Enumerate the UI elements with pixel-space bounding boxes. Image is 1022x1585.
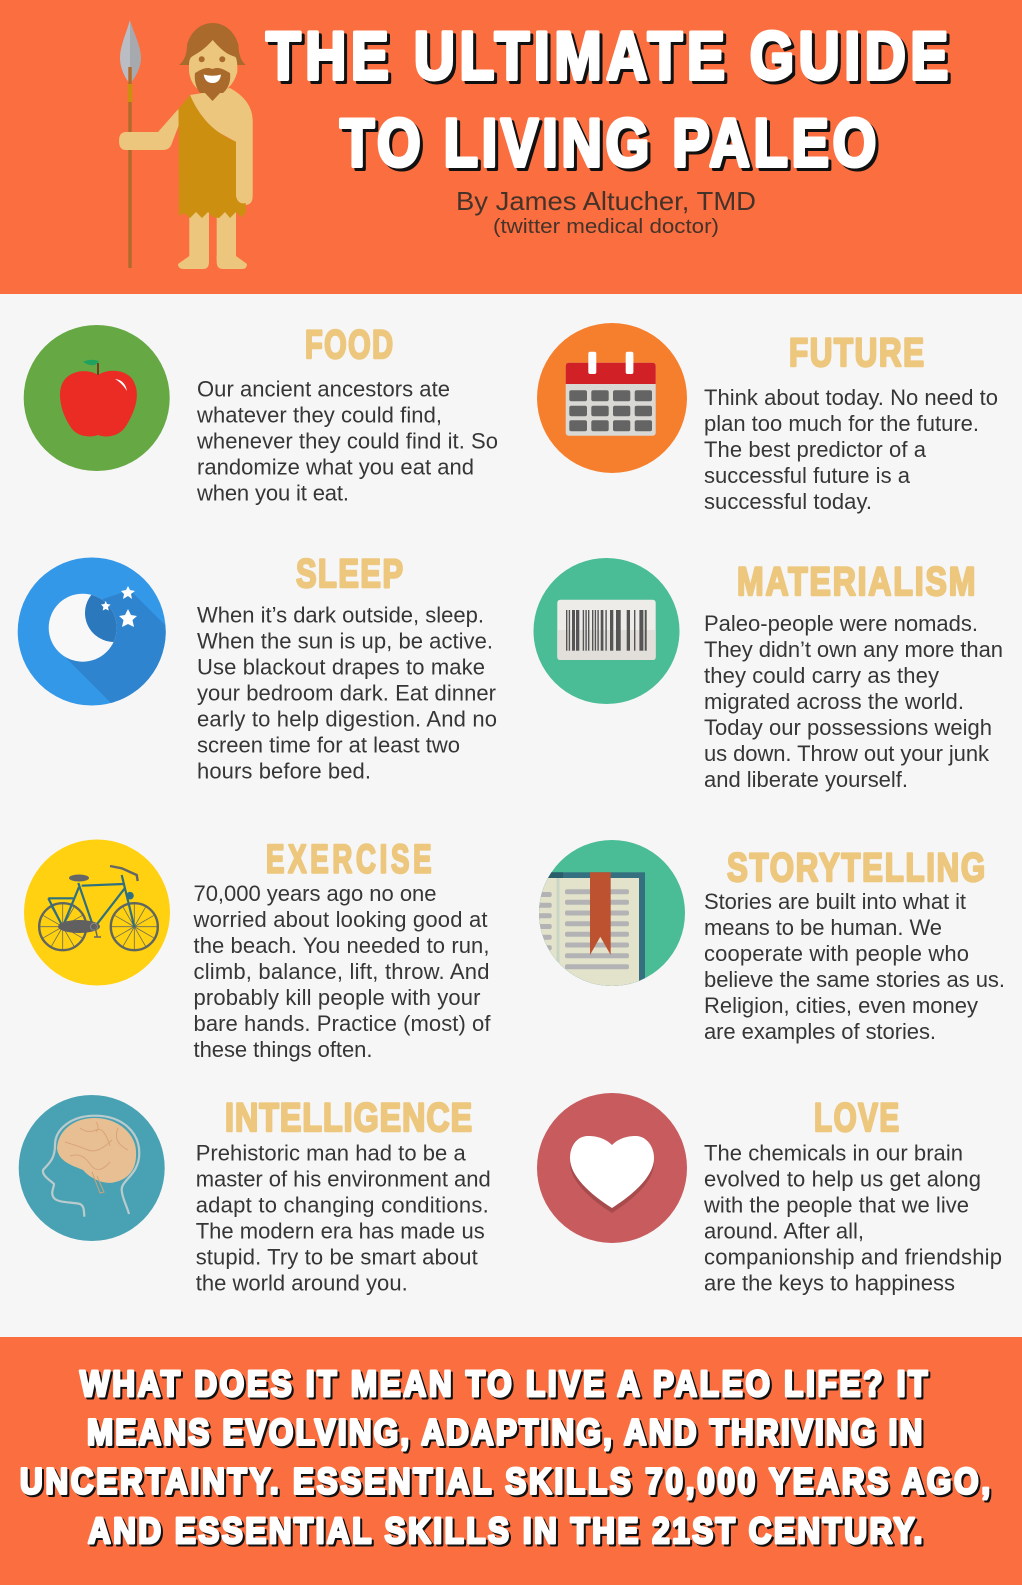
text: exercise: 70,000 years ago no one <box>194 881 436 906</box>
heading: intelligence: INTELLIGENCE <box>225 1095 472 1140</box>
text: food: whenever they could find it. So <box>196 429 498 454</box>
heading: materialism: MATERIALISM <box>737 559 975 604</box>
text: storytelling: Stories are built into what it <box>704 889 966 914</box>
text: intelligence: Prehistoric man had to be a <box>196 1141 466 1166</box>
text: love: evolved to help us get along <box>704 1167 981 1192</box>
text: future <box>704 385 998 514</box>
title: THE ULTIMATE GUIDE <box>266 18 948 94</box>
panel: storytelling <box>530 840 1005 1044</box>
text: love: companionship and friendship <box>704 1245 1002 1270</box>
text: storytelling: cooperate with people who <box>704 941 969 966</box>
title <box>266 18 948 181</box>
text: exercise: climb, balance, lift, throw. And <box>194 959 490 984</box>
icon: brain in head <box>19 1095 165 1241</box>
text: materialism: us down. Throw out your junk <box>704 741 990 766</box>
text: food: whatever they could find, <box>196 403 442 428</box>
text: love: are the keys to happiness <box>704 1271 955 1296</box>
text: future: Think about today. No need to <box>704 385 998 410</box>
heading: future: FUTURE <box>789 329 924 375</box>
text: future: The best predictor of a <box>704 437 927 462</box>
heading: storytelling: STORYTELLING <box>727 845 985 890</box>
text: materialism: Paleo-people were nomads. <box>704 611 978 636</box>
icon: bicycle <box>24 840 170 986</box>
text: food: randomize what you eat and <box>197 455 474 480</box>
text: sleep: When the sun is up, be active. <box>197 629 493 654</box>
icon: barcode <box>534 558 680 704</box>
text: future: plan too much for the future. <box>704 411 979 436</box>
text: storytelling <box>704 889 1005 1044</box>
text: storytelling: means to be human. We <box>704 915 942 940</box>
footer statement <box>20 1364 990 1552</box>
panel: materialism <box>534 558 1003 792</box>
panel: intelligence <box>19 1095 491 1296</box>
text: food <box>196 377 498 506</box>
text: sleep: When it’s dark outside, sleep. <box>197 603 484 628</box>
text: materialism: Today our possessions weigh <box>704 715 992 740</box>
text: intelligence: The modern era has made us <box>196 1219 485 1244</box>
heading: sleep: SLEEP <box>296 551 403 596</box>
panel: food <box>24 322 498 506</box>
title: TO LIVING PALEO <box>340 106 876 181</box>
text: exercise <box>192 881 491 1062</box>
icon: calendar <box>537 323 687 473</box>
text: food: Our ancient ancestors ate <box>197 377 450 402</box>
text: intelligence: the world around you. <box>196 1271 408 1296</box>
footer statement: MEANS EVOLVING, ADAPTING, AND THRIVING IN <box>87 1412 922 1453</box>
icon: spear <box>120 20 141 268</box>
panel: sleep <box>18 551 497 784</box>
text: storytelling: believe the same stories as us. <box>704 967 1005 992</box>
text: future: successful future is a <box>704 463 911 488</box>
text: sleep: your bedroom dark. Eat dinner <box>197 681 496 706</box>
text: food: when you it eat. <box>196 481 349 506</box>
text: love: with the people that we live <box>703 1193 969 1218</box>
text: love: around. After all, <box>704 1219 864 1244</box>
text: love: The chemicals in our brain <box>704 1141 963 1166</box>
panel: exercise <box>24 838 491 1062</box>
heading: food: FOOD <box>305 322 393 367</box>
text: exercise: worried about looking good at <box>192 907 488 932</box>
text: storytelling: Religion, cities, even money <box>704 993 978 1018</box>
text: intelligence: master of his environment and <box>196 1167 491 1192</box>
text: materialism: migrated across the world. <box>704 689 964 714</box>
text: sleep: Use blackout drapes to make <box>197 655 485 680</box>
footer statement: UNCERTAINTY. ESSENTIAL SKILLS 70,000 YEARS AGO, <box>20 1461 990 1502</box>
text: materialism: They didn’t own any more than <box>704 637 1003 662</box>
text: materialism: they could carry as they <box>704 663 939 688</box>
text: exercise: probably kill people with your <box>194 985 480 1010</box>
panel: love <box>537 1093 1002 1296</box>
text: sleep: hours before bed. <box>197 759 371 784</box>
text: exercise: these things often. <box>194 1037 372 1062</box>
icon: book <box>539 840 685 986</box>
text: future: successful today. <box>704 489 872 514</box>
icon: caveman <box>119 23 253 269</box>
icon: apple <box>24 325 170 471</box>
panel: footer <box>0 1337 1022 1585</box>
text: intelligence: adapt to changing conditions. <box>196 1193 489 1218</box>
text: sleep <box>197 603 497 784</box>
text: love <box>703 1141 1002 1296</box>
icon: moon and stars <box>18 558 166 706</box>
panel: future <box>537 323 998 514</box>
panel: header <box>0 0 1022 294</box>
text: intelligence <box>196 1141 491 1296</box>
heading: exercise: EXERCISE <box>266 838 432 882</box>
text: exercise: the beach. You needed to run, <box>194 933 490 958</box>
text: exercise: bare hands. Practice (most) of <box>194 1011 491 1036</box>
heading: love: LOVE <box>814 1096 899 1140</box>
text: intelligence: stupid. Try to be smart about <box>196 1245 478 1270</box>
byline: By James Altucher, TMD <box>456 186 756 216</box>
text: materialism <box>704 611 1003 792</box>
footer statement: WHAT DOES IT MEAN TO LIVE A PALEO LIFE? IT <box>80 1364 928 1405</box>
footer statement: AND ESSENTIAL SKILLS IN THE 21ST CENTURY. <box>88 1511 922 1552</box>
text: materialism: and liberate yourself. <box>704 767 908 792</box>
text: sleep: screen time for at least two <box>197 733 460 758</box>
icon: heart <box>537 1093 687 1243</box>
byline note: (twitter medical doctor) <box>493 216 719 238</box>
text: sleep: early to help digestion. And no <box>197 707 497 732</box>
text: storytelling: are examples of stories. <box>704 1019 936 1044</box>
